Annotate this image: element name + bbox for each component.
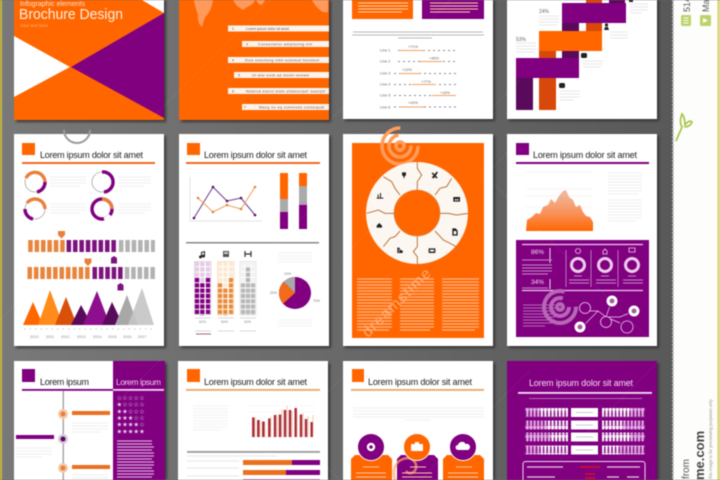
contents list: Ut wisi enim ad minim veniam — [252, 74, 309, 78]
line rows: +43% — [408, 101, 418, 105]
panel: bar chart page — [178, 361, 328, 480]
value 34%: 34% — [531, 279, 544, 286]
pie labels: 10% — [284, 272, 291, 276]
value 53%: 53% — [516, 37, 527, 43]
timeline bars row 1 — [28, 240, 155, 252]
icon: music — [199, 251, 205, 258]
contents list: 7 — [244, 106, 246, 110]
horizontal stacked bar 2 — [243, 470, 320, 475]
purple text box — [422, 0, 484, 19]
timeline node 2 — [58, 434, 68, 444]
heading square — [22, 369, 35, 382]
line rows: Line 3 — [380, 72, 390, 76]
line rows — [380, 45, 450, 110]
horizontal stacked bar 3 — [243, 479, 320, 480]
spiral on middle tab — [394, 458, 416, 480]
heading: Lorem ipsum dolor sit amet — [204, 150, 307, 160]
line rows: Line 6 — [380, 106, 390, 110]
contents list: 6 — [232, 90, 234, 94]
green badges — [681, 15, 711, 26]
grid underlines — [195, 318, 256, 331]
data table — [523, 462, 645, 480]
panel: area chart page — [507, 134, 657, 346]
section divider — [187, 451, 320, 453]
pie labels: 70% — [313, 299, 320, 303]
stacked bar 2 — [299, 173, 307, 229]
article text lines — [608, 173, 642, 221]
area chart — [526, 190, 593, 231]
value 86%: 86% — [531, 249, 544, 256]
heading rule — [186, 389, 320, 391]
year labels: 2015 — [108, 335, 116, 339]
line rows: Line 1 — [380, 48, 390, 52]
panel: orange wheel page — [343, 128, 493, 346]
perforated edge — [672, 0, 674, 480]
watermark text: dreamstime — [359, 265, 434, 341]
panel: staircase page — [507, 0, 657, 119]
orange icon grid — [218, 262, 234, 316]
stacked bar 1 — [280, 173, 288, 229]
intro text lines — [352, 32, 484, 38]
dotted lines — [394, 50, 456, 107]
heading: Lorem ipsum — [40, 377, 89, 387]
staircase blocks — [516, 0, 626, 110]
heading: Lorem ipsum dolor sit amet — [40, 150, 143, 160]
heading rule — [351, 389, 484, 391]
subhead line — [529, 398, 642, 400]
orange text box — [352, 0, 413, 19]
timeline bars row 2 — [28, 267, 156, 279]
year labels: 2013 — [77, 335, 85, 339]
line rows: +77% — [421, 80, 431, 84]
triangle chart — [23, 288, 154, 325]
year labels: 2017 — [138, 335, 146, 339]
chart grid — [526, 172, 592, 219]
year axis — [24, 328, 154, 330]
pie labels: 20% — [270, 291, 277, 295]
heading square — [516, 143, 529, 155]
network icon nodes — [574, 295, 640, 333]
people row 1 — [525, 408, 645, 417]
contents list: Lorem ipsum dolor sit amet — [246, 27, 289, 31]
heading: Lorem ipsum dolor sit amet — [533, 150, 637, 160]
icon: image — [223, 251, 229, 257]
timeline markers — [58, 231, 124, 290]
ring icons — [576, 248, 635, 254]
heading rule — [516, 162, 649, 164]
year labels: 2010 — [30, 335, 38, 339]
people row 3 — [525, 432, 645, 442]
wheel centre — [394, 190, 440, 236]
pie text lines — [278, 253, 312, 326]
line rows: Line 2 — [380, 60, 390, 64]
watermark spiral — [544, 291, 576, 323]
timeline text lines — [16, 423, 108, 478]
line rows: +71% — [408, 45, 418, 49]
timeline label bars — [16, 411, 110, 469]
small icons — [559, 0, 633, 88]
vertical rules — [566, 250, 618, 287]
orange ranges — [399, 50, 456, 107]
contents list: Nostrud exerci enim ullamcorper suscipit — [246, 90, 325, 94]
star ratings: ★★★☆☆ — [116, 415, 145, 422]
star ratings: ★☆☆☆☆ — [116, 402, 145, 408]
panel: dot line chart page — [343, 0, 493, 119]
bar chart — [248, 406, 314, 437]
contents list: 3 — [246, 42, 248, 46]
yellow edge — [718, 0, 719, 480]
heading square — [187, 369, 200, 382]
left yellow edge — [0, 0, 2, 480]
from label: from — [681, 459, 692, 479]
star ratings: ★★★★☆ — [116, 422, 145, 428]
wheel — [366, 162, 468, 264]
line chart — [190, 177, 262, 221]
year labels: 2016 — [123, 335, 131, 339]
panel: brochure cover — [14, 0, 164, 120]
box text lines — [358, 3, 478, 12]
line rows: +18% — [440, 91, 450, 95]
site name: me.com — [692, 431, 707, 480]
line rows: Line 4 — [380, 82, 390, 86]
contents list: 4 — [232, 58, 234, 62]
contents list — [228, 26, 329, 110]
sidebar rule — [113, 389, 164, 391]
sidebar heading: Lorem ipsum — [116, 377, 161, 387]
gray icon grid — [240, 262, 256, 315]
star ratings: ☆☆☆☆☆ — [116, 395, 145, 402]
year labels: 2011 — [46, 335, 54, 339]
circle icon gear — [358, 434, 384, 460]
heading: Lorem ipsum dolor sit amet — [368, 377, 472, 387]
green leaf icon — [676, 114, 692, 141]
heading rule — [186, 162, 320, 164]
year labels: 2012 — [61, 335, 69, 339]
pie chart — [279, 277, 311, 309]
ring charts — [572, 258, 638, 272]
ring captions — [569, 276, 643, 283]
row box labels — [576, 412, 593, 450]
timeline axis — [62, 391, 64, 480]
donut captions — [50, 177, 151, 213]
circle icon cloud — [450, 434, 476, 460]
wheel dividers — [367, 162, 468, 265]
heading square — [22, 143, 35, 155]
heading square — [352, 369, 364, 382]
panel rules — [522, 244, 643, 290]
heading rule — [22, 389, 113, 391]
tab right — [443, 455, 484, 480]
panel text lines — [523, 305, 555, 326]
star ratings: ★★★★★ — [116, 428, 145, 436]
heading rule — [518, 392, 652, 394]
gray text lines — [516, 4, 648, 100]
heading: Lorem ipsum dolor sit amet — [204, 377, 307, 387]
section divider — [186, 242, 319, 244]
contents list: Mauq no eq commodo consequat — [259, 106, 324, 110]
line rows: +19% — [402, 68, 412, 72]
purple sidebar — [113, 361, 165, 480]
contents list: 2 — [232, 27, 234, 31]
watermark spiral — [382, 128, 418, 164]
network lines — [582, 300, 634, 327]
donut charts — [25, 172, 113, 219]
grid captions — [199, 320, 251, 324]
grid accent rules — [196, 333, 211, 335]
network nodes — [580, 302, 633, 333]
tab text — [356, 467, 478, 477]
heading rule — [22, 162, 155, 164]
right info strip — [673, 0, 720, 480]
heading: Lorem ipsum dolor sit amet — [529, 378, 634, 388]
timeline node 1 — [58, 409, 68, 419]
pie labels — [270, 272, 320, 303]
heading square — [187, 143, 200, 155]
article text lines — [193, 406, 228, 430]
watermark spiral top left — [64, 117, 90, 143]
panel: timeline and ratings page — [14, 361, 165, 480]
world map silhouette — [194, 0, 328, 27]
notice: this image is for previewing purposes only — [708, 398, 713, 479]
grid captions: 60% — [199, 320, 206, 324]
stat arrows — [549, 248, 551, 289]
line rows: Line 5 — [380, 94, 390, 98]
orange background — [352, 143, 484, 338]
intro text lines — [353, 408, 484, 420]
cover subtitle: Your text here — [20, 23, 48, 28]
people row 2 — [525, 420, 645, 430]
cover eyebrow: Infographic elements — [20, 1, 85, 8]
grid captions: 30% — [244, 320, 251, 324]
tab middle — [397, 455, 438, 480]
horizontal stacked bar 1 — [243, 460, 320, 465]
value 24%: 24% — [539, 9, 550, 15]
sidebar text lines — [117, 441, 154, 477]
contents list: Consectetur adipiscing elit — [258, 42, 312, 46]
panel: contents page — [179, 0, 329, 120]
year labels: 2014 — [93, 335, 101, 339]
panel: donuts and timelines page — [14, 134, 164, 346]
icon: arrows — [245, 251, 251, 257]
wheel text columns — [357, 279, 479, 330]
cover title: Brochure Design — [19, 7, 123, 23]
contents list: 5 — [238, 74, 240, 78]
purple icon grid — [194, 262, 211, 315]
circle icon briefcase — [404, 434, 430, 460]
panel: people stats page — [507, 361, 657, 480]
wheel icons — [377, 172, 460, 253]
timeline node 3 — [58, 463, 68, 473]
contents list: Duis execitung nibh euismod tincidunt — [245, 58, 319, 62]
panel: circle tabs page — [343, 361, 493, 480]
stacked bar labels — [187, 456, 277, 476]
purple stats panel — [516, 240, 649, 337]
people row 4 — [525, 446, 645, 454]
star ratings: ★★☆☆☆ — [116, 408, 145, 416]
stat text — [522, 260, 552, 288]
line rows: +46% — [429, 56, 439, 60]
tab left — [351, 455, 392, 480]
grid captions: 50% — [221, 320, 228, 324]
panel: line chart and pie page — [179, 134, 329, 346]
year labels — [30, 335, 146, 339]
star ratings — [116, 395, 145, 436]
